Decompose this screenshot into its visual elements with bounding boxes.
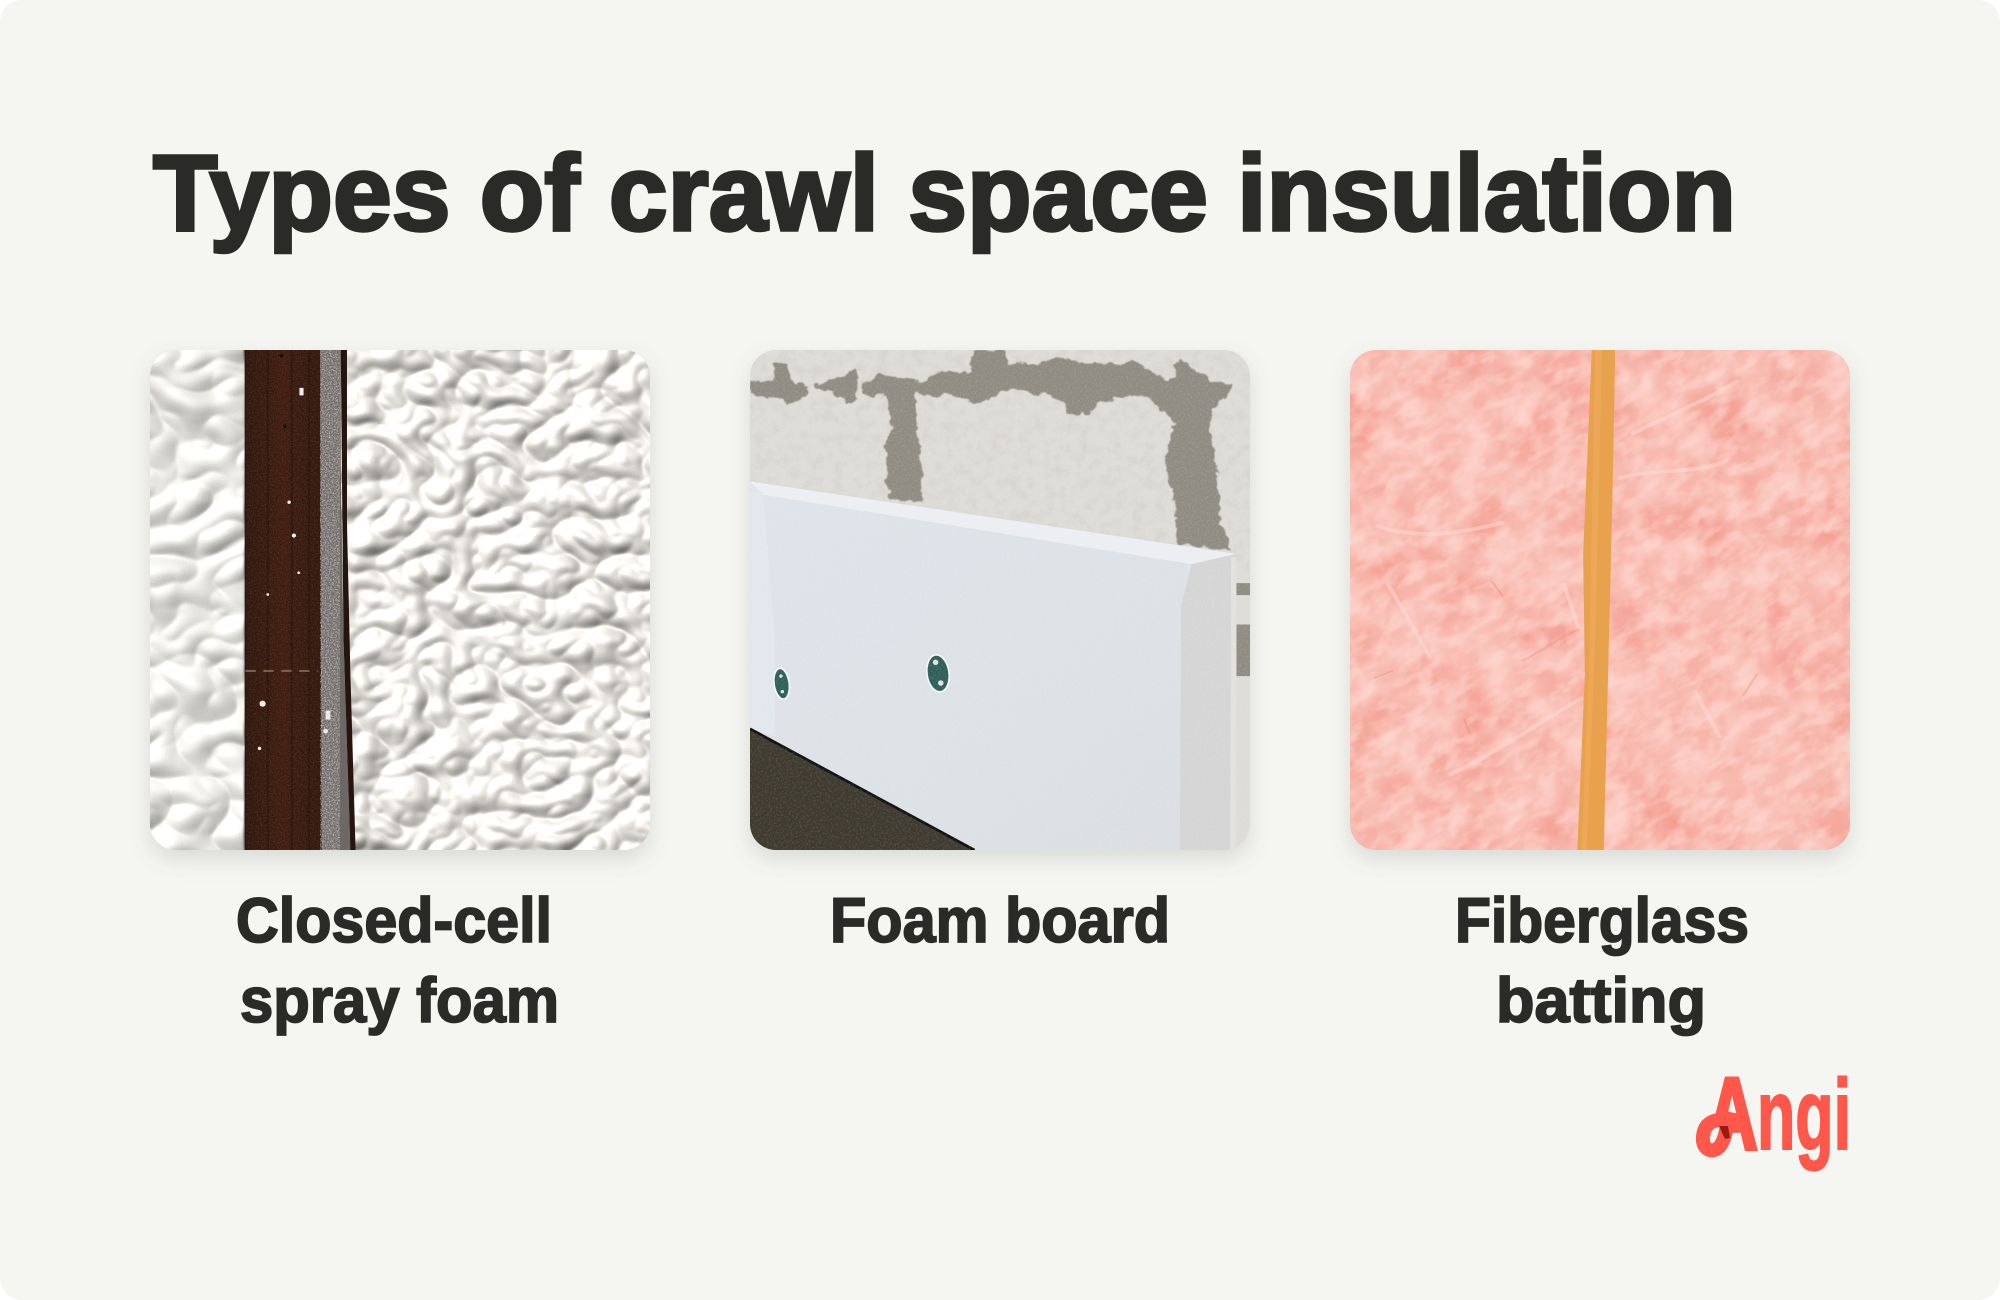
photo: closed-cell spray foam — [130, 330, 670, 870]
logo: Angi: A — [1706, 1056, 1758, 1171]
panel: fiberglass batting — [1344, 350, 1856, 1036]
wooden stud — [245, 350, 322, 850]
label: closed-cell spray foam: spray foam — [240, 966, 559, 1036]
label: fiberglass batting: Fiberglass — [1455, 886, 1749, 956]
mortar lines — [750, 351, 1235, 550]
label: closed-cell spray foam — [236, 886, 559, 1036]
title: Types of crawl space insulation — [153, 132, 1736, 253]
label: closed-cell spray foam: Closed-cell — [236, 886, 552, 956]
batting fibers — [1378, 382, 1736, 774]
label: fiberglass batting: batting — [1496, 966, 1706, 1036]
logo: Angi — [1696, 1076, 1848, 1172]
insulation fasteners — [772, 653, 952, 700]
foam board sheet — [750, 482, 1236, 850]
panel: foam board — [750, 350, 1250, 956]
label: foam board: Foam board — [830, 886, 1170, 956]
label: fiberglass batting — [1455, 886, 1749, 1036]
panel: closed-cell spray foam — [130, 330, 670, 1036]
brick foundation — [750, 729, 975, 850]
logo: Angi: ngi — [1757, 1059, 1851, 1171]
kraft facing strip — [1577, 350, 1615, 850]
photo: fiberglass batting — [1344, 350, 1856, 864]
foam-dusted stud edge — [320, 350, 350, 850]
photo: foam board — [750, 350, 1250, 850]
